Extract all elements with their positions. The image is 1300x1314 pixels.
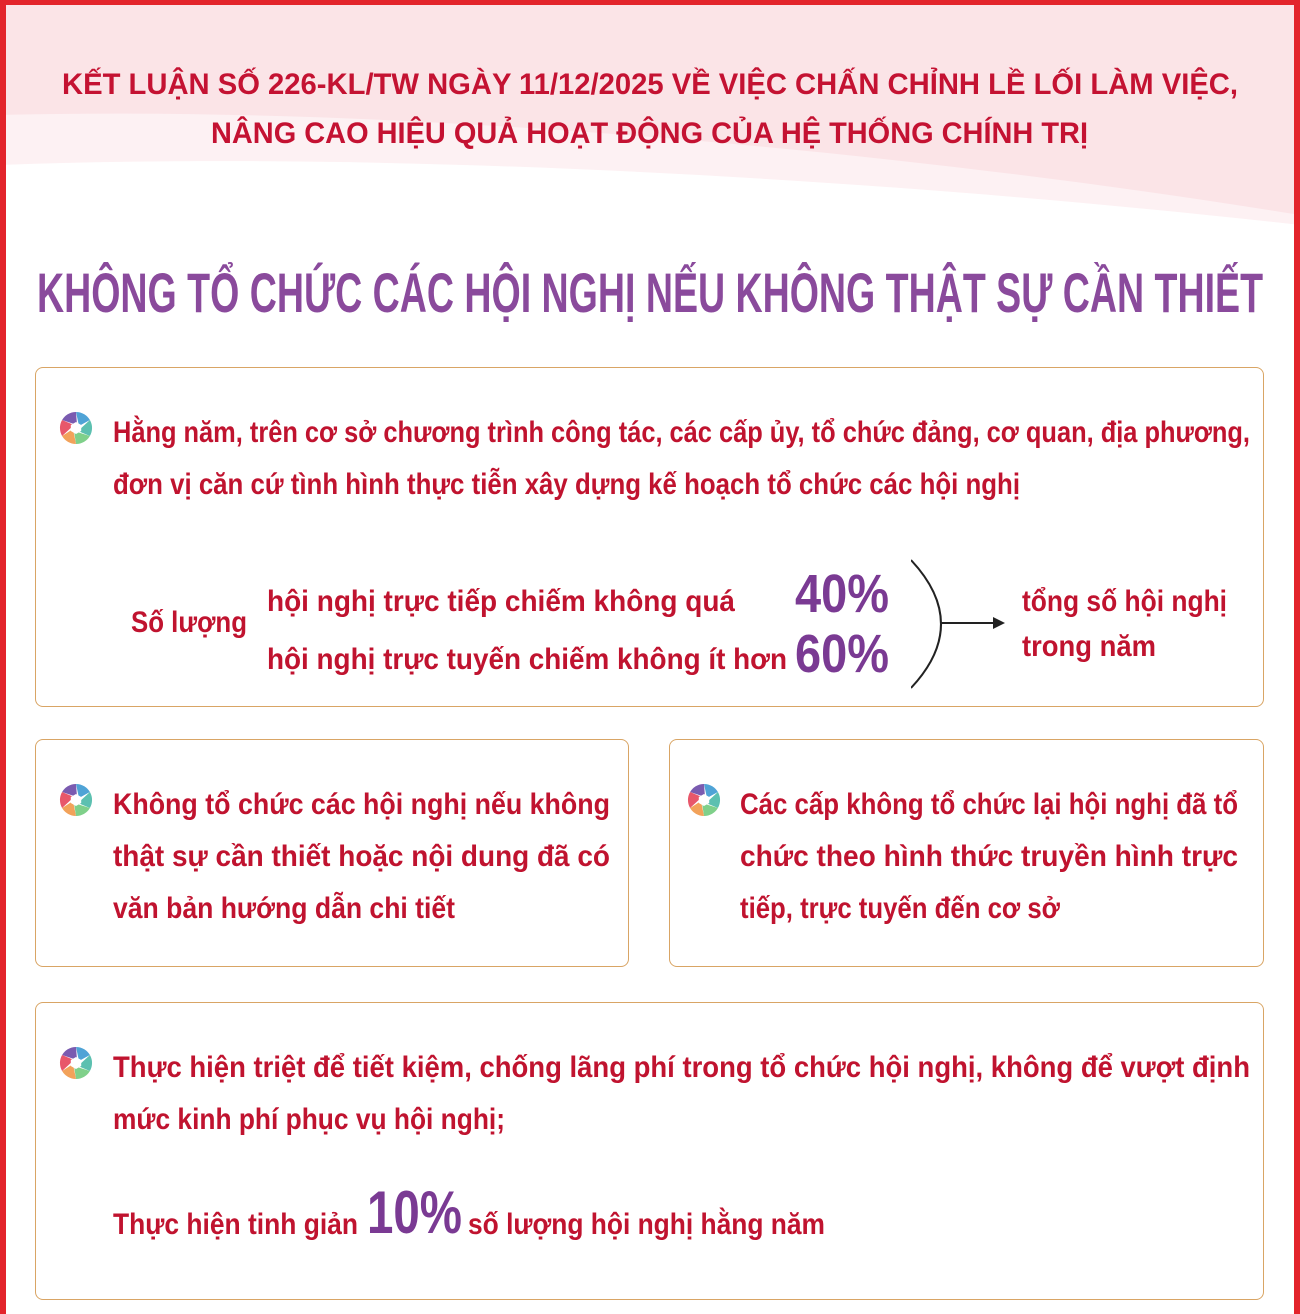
icon: aperture: [688, 784, 720, 816]
text: intro and quotas: Số lượng: [131, 606, 247, 639]
text: intro and quotas: 60%: [795, 624, 889, 684]
text: văn bản hướng dẫn chi tiết: [113, 891, 455, 925]
text: [113, 788, 610, 925]
text: intro and quotas: 40%: [795, 564, 889, 624]
panel: conference planning: [35, 367, 1264, 707]
arrow: bracket to total: [911, 559, 1005, 689]
text: intro and quotas: trong năm: [1022, 630, 1156, 663]
text: savings and 10%: 10%: [367, 1179, 462, 1246]
panel: no repeated conferences: [669, 739, 1264, 967]
icon: aperture: [60, 784, 92, 816]
title: [62, 67, 1238, 150]
header background: [6, 5, 1294, 224]
text: thật sự cần thiết hoặc nội dung đã có: [113, 840, 610, 873]
text: [740, 788, 1238, 925]
text: savings and 10%: Thực hiện tinh giản: [113, 1208, 358, 1241]
text: intro and quotas: tổng số hội nghị: [1022, 585, 1227, 618]
title: KẾT LUẬN SỐ 226-KL/TW NGÀY 11/12/2025 VỀ VIỆC CHẤN CHỈNH LỀ LỐI LÀM VIỆC,: [62, 67, 1238, 101]
icon: aperture: [60, 412, 92, 444]
panel: no unnecessary conferences: [35, 739, 629, 967]
text: tiếp, trực tuyến đến cơ sở: [740, 892, 1061, 925]
text: intro and quotas: [113, 415, 1250, 684]
text: chức theo hình thức truyền hình trực: [740, 840, 1238, 873]
text: intro and quotas: đơn vị căn cứ tình hình thực tiễn xây dựng kế hoạch tổ chức các hội nghị: [113, 467, 1020, 501]
text: intro and quotas: hội nghị trực tuyến chiếm không ít hơn: [267, 643, 787, 676]
text: savings and 10%: mức kinh phí phục vụ hội nghị;: [113, 1103, 505, 1136]
title: NÂNG CAO HIỆU QUẢ HOẠT ĐỘNG CỦA HỆ THỐNG CHÍNH TRỊ: [211, 116, 1088, 150]
panel: savings: [35, 1002, 1264, 1300]
icon: aperture: [60, 1047, 92, 1079]
text: savings and 10%: số lượng hội nghị hằng năm: [468, 1207, 825, 1241]
text: intro and quotas: hội nghị trực tiếp chiếm không quá: [267, 585, 735, 618]
